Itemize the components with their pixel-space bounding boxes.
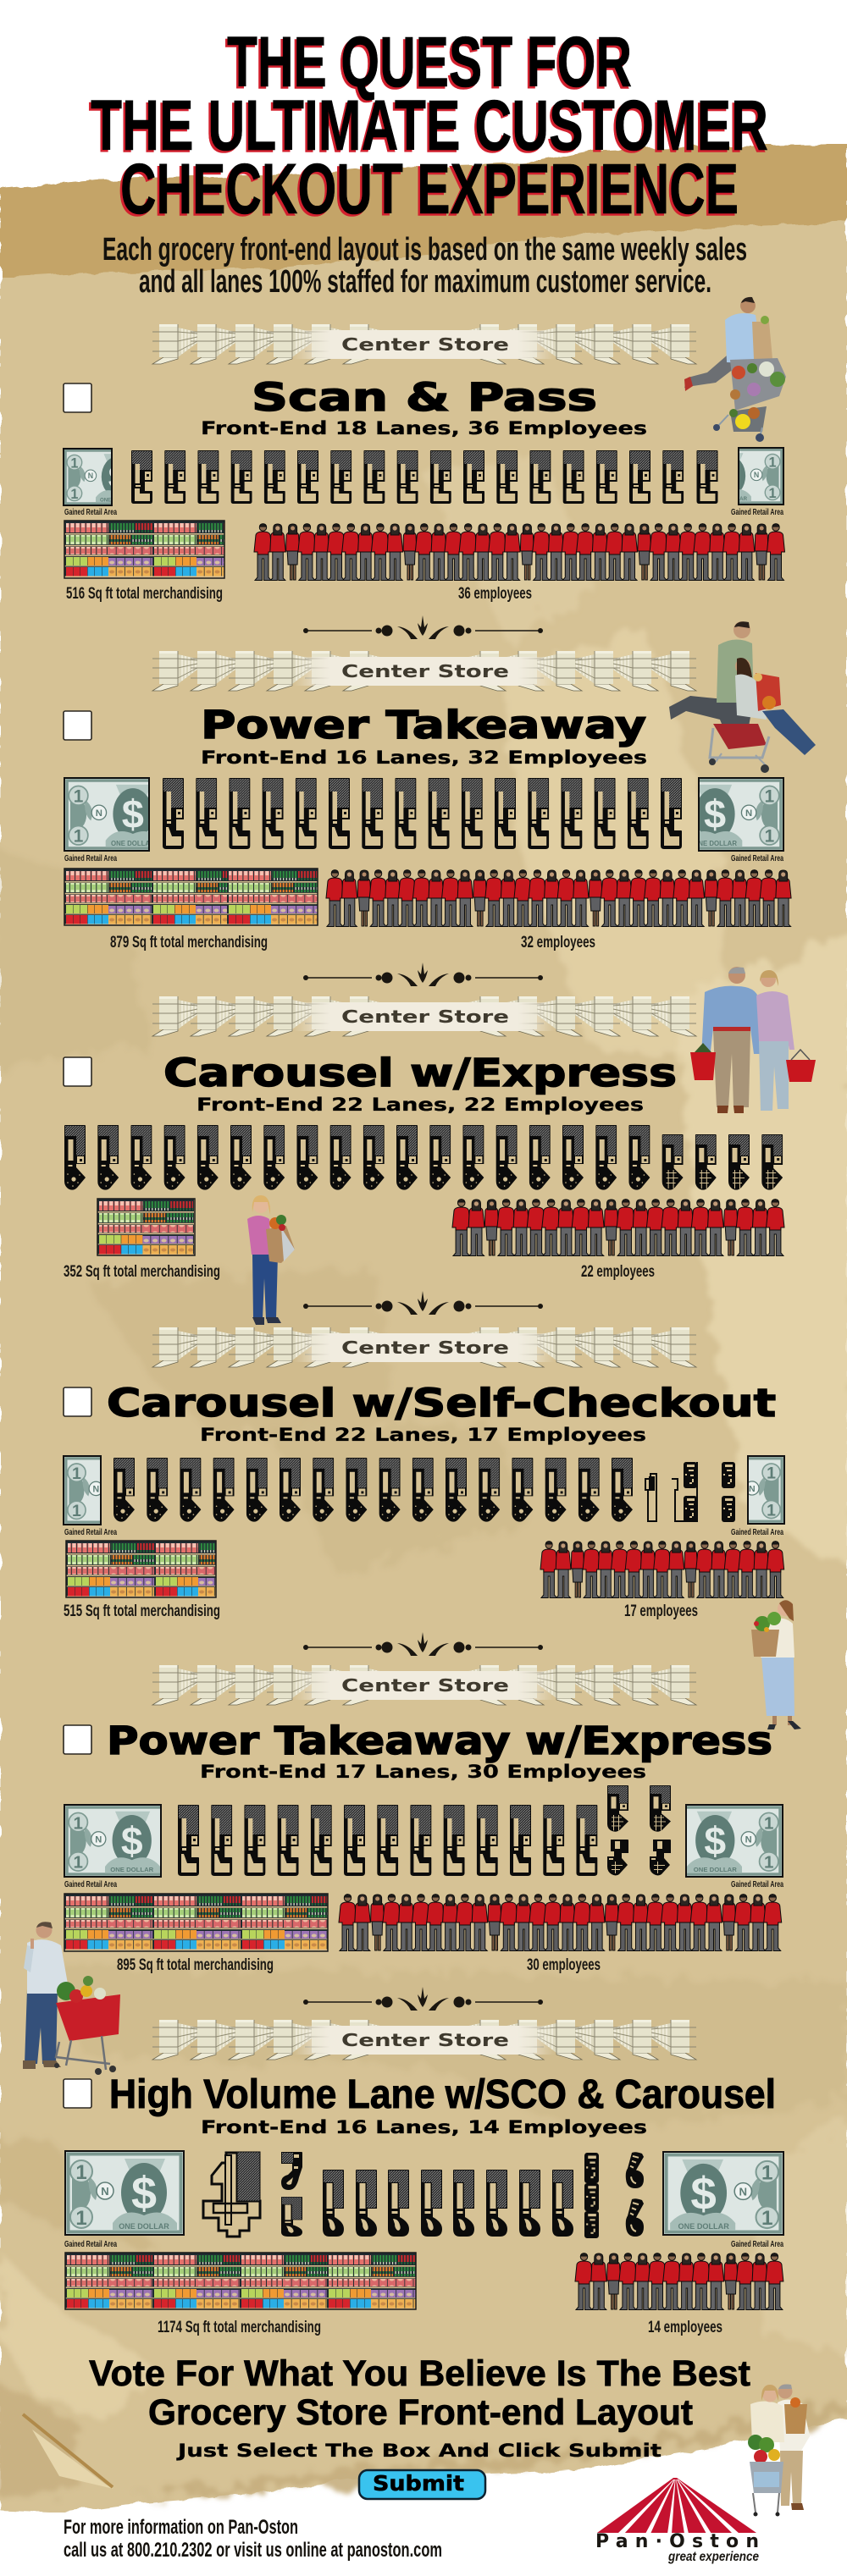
photo: couple with cart (669, 621, 816, 773)
caption merchandising: 515 Sq ft total merchandising (64, 1602, 220, 1620)
panel: Carousel w/Self-Checkout (64, 1327, 784, 1620)
title (88, 22, 768, 230)
employees (540, 1542, 784, 1598)
lanes (178, 1805, 597, 1876)
gained area left (64, 2151, 184, 2249)
express lanes (607, 1785, 671, 1876)
caption merchandising: 516 Sq ft total merchandising (66, 585, 223, 603)
lanes (131, 450, 718, 504)
caption merchandising: 895 Sq ft total merchandising (117, 1956, 274, 1974)
center store banner: Center Store (341, 661, 509, 681)
gained area left (64, 1456, 160, 1537)
intro text (102, 232, 747, 300)
submit button (359, 2470, 485, 2499)
gained area left: Gained Retail Area (64, 2239, 117, 2249)
gained area right: Gained Retail Area (731, 507, 783, 517)
photo: woman in blue skirt (751, 1600, 801, 1729)
panel: Carousel w/Express (64, 967, 816, 1325)
lanes (281, 2152, 573, 2237)
contact footer: For more information on Pan-Oston (64, 2516, 298, 2539)
checkbox (64, 1725, 91, 1754)
shelf (66, 1541, 249, 1597)
heading: High Volume Lane w/SCO & Carousel (109, 2072, 776, 2117)
gained area left (64, 449, 144, 517)
caption merchandising: 352 Sq ft total merchandising (64, 1263, 220, 1281)
photo: man running with cart (684, 297, 786, 442)
gained area right (703, 448, 783, 517)
gained area right (680, 778, 783, 863)
center store banner: Center Store (341, 1007, 509, 1027)
gained area right: Gained Retail Area (731, 853, 783, 863)
gained area right (681, 1805, 783, 1889)
gained area right: Gained Retail Area (731, 2239, 783, 2249)
panel: Power Takeaway (64, 621, 816, 952)
center store banner (152, 2020, 696, 2060)
shelf (65, 2253, 422, 2309)
caption employees: 17 employees (624, 1602, 698, 1620)
Pan-Oston logo: great experience (667, 2550, 759, 2564)
lanes (113, 1458, 633, 1522)
contact footer (64, 2516, 442, 2562)
caption employees: 30 employees (527, 1956, 601, 1974)
lanes (64, 1125, 783, 1190)
center store banner (152, 1327, 696, 1367)
subheading: Front-End 17 Lanes, 30 Employees (200, 1762, 646, 1782)
panel: High Volume Lane w/SCO & Carousel (64, 2020, 783, 2336)
caption merchandising: 879 Sq ft total merchandising (110, 934, 268, 952)
center store banner (152, 996, 696, 1036)
employees (452, 1200, 784, 1256)
divider ornament (303, 1291, 543, 1315)
hook lanes (626, 2152, 644, 2237)
gained area left: Gained Retail Area (64, 1879, 117, 1889)
checkbox (64, 711, 91, 740)
photo: man with red cart (23, 1922, 120, 2075)
self-checkout units (645, 1462, 735, 1522)
vote instruction: Just Select The Box And Click Submit (175, 2441, 662, 2461)
Pan-Oston logo (595, 2478, 759, 2564)
lanes (163, 778, 682, 849)
center store banner: Center Store (341, 2030, 509, 2050)
divider ornament (303, 1987, 543, 2011)
subheading: Front-End 16 Lanes, 32 Employees (201, 747, 647, 768)
divider ornament (303, 615, 543, 639)
employees (254, 524, 784, 581)
gained area right (663, 2152, 783, 2249)
self-checkout column (584, 2153, 599, 2238)
photo: woman with grocery bag (247, 1195, 295, 1325)
photo: couple with grocery cart (748, 2384, 810, 2516)
employees (575, 2253, 783, 2309)
checkbox (64, 1387, 91, 1416)
vote call to action heading: Vote For What You Believe Is The Best (89, 2353, 750, 2394)
heading: Carousel w/Express (163, 1051, 677, 1095)
panel: Scan & Pass (64, 297, 786, 603)
title: THE QUEST FOR (225, 24, 630, 103)
photo: senior couple with baskets (690, 967, 816, 1113)
shelf (64, 869, 322, 925)
gained area right: Gained Retail Area (731, 1527, 783, 1537)
gained area right: Gained Retail Area (731, 1879, 783, 1889)
heading: Power Takeaway (201, 703, 646, 747)
center store banner: Center Store (341, 1338, 509, 1358)
heading: Carousel w/Self-Checkout (107, 1381, 776, 1426)
caption employees: 22 employees (581, 1263, 655, 1281)
divider ornament (303, 963, 543, 986)
shelf (97, 1199, 195, 1255)
subheading: Front-End 22 Lanes, 22 Employees (197, 1095, 644, 1115)
center store banner: Center Store (341, 1675, 509, 1696)
high volume lane (203, 2152, 260, 2237)
gained area left: Gained Retail Area (64, 507, 117, 517)
center store banner: Center Store (341, 334, 509, 355)
caption employees: 36 employees (458, 585, 532, 603)
shelf (64, 1894, 335, 1951)
divider ornament (303, 1632, 543, 1656)
caption employees: 14 employees (648, 2319, 722, 2336)
gained area left: Gained Retail Area (64, 853, 117, 863)
vote call to action heading: Grocery Store Front-end Layout (148, 2392, 693, 2433)
subheading: Front-End 18 Lanes, 36 Employees (201, 418, 647, 439)
gained area right (688, 1456, 784, 1537)
heading: Power Takeaway w/Express (107, 1718, 772, 1763)
caption employees: 32 employees (521, 934, 595, 952)
submit button: Submit (373, 2471, 464, 2496)
gained area left: Gained Retail Area (64, 1527, 117, 1537)
checkbox (64, 383, 91, 412)
gained area left (64, 1805, 166, 1889)
contact footer: call us at 800.210.2302 or visit us online at panoston.com (64, 2539, 442, 2562)
employees (339, 1895, 782, 1950)
center store banner (152, 1665, 696, 1705)
checkbox (64, 2079, 91, 2108)
subheading: Front-End 16 Lanes, 14 Employees (201, 2117, 647, 2137)
employees (326, 870, 791, 926)
gained area left (64, 778, 168, 863)
caption merchandising: 1174 Sq ft total merchandising (158, 2319, 321, 2336)
center store banner (152, 651, 696, 691)
center store banner (152, 324, 696, 364)
vote call to action heading (89, 2353, 750, 2433)
checkbox (64, 1057, 91, 1086)
Pan-Oston logo: Pan·Oston (595, 2531, 759, 2552)
shelf (64, 521, 247, 578)
subheading: Front-End 22 Lanes, 17 Employees (200, 1425, 646, 1445)
title: THE QUEST FOR (227, 22, 632, 102)
heading: Scan & Pass (252, 375, 597, 420)
panel: Power Takeaway w/Express (23, 1600, 801, 2075)
